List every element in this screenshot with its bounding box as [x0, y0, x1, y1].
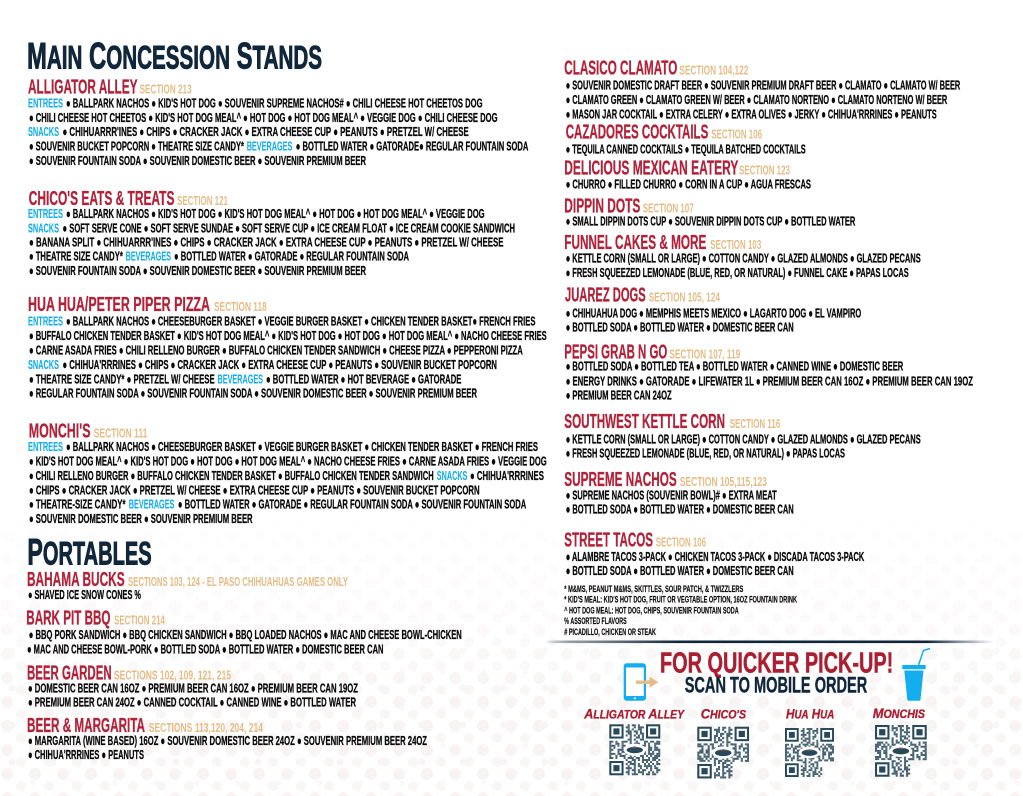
stand name: DIPPIN DOTS	[564, 194, 640, 217]
menu items: ● BOTTLED WATER ● GATORADE ● REGULAR FOUNTAIN SODA ● SOUVENIR FOUNTAIN SODA	[178, 498, 526, 512]
icon: phone with arrow	[624, 663, 658, 701]
menu items: ● BOTTLED SODA ● BOTTLED WATER ● DOMESTIC BEER CAN	[566, 502, 794, 516]
menu items: ● CHIHUA'RRRINES	[470, 469, 544, 483]
stand name: CAZADORES COCKTAILS	[566, 121, 708, 144]
heading: for quicker pick-up: FOR QUICKER PICK-UP!	[660, 648, 893, 680]
menu items: ● BOTTLED WATER ● GATORADE● REGULAR FOUNTAIN SODA	[296, 140, 528, 154]
panel: dippin dots	[564, 194, 855, 229]
menu items: ● SOUVENIR DOMESTIC BEER ● SOUVENIR PREMIUM BEER	[29, 512, 253, 526]
menu items: ● TEQUILA CANNED COCKTAILS ● TEQUILA BATCHED COCKTAILS	[566, 142, 806, 156]
menu items	[28, 315, 547, 400]
section label: SECTIONS 102, 109, 121, 215	[114, 667, 231, 682]
menu items: ENTREES	[28, 96, 63, 110]
menu items: BEVERAGES	[129, 498, 174, 512]
section label: SECTION 121	[177, 193, 228, 208]
menu items: ● REGULAR FOUNTAIN SODA ● SOUVENIR FOUNTAIN SODA ● SOUVENIR DOMESTIC BEER ● SOUVENIR PREMIUM BEER	[29, 386, 477, 400]
footnotes: # PICADILLO, CHICKEN OR STEAK	[564, 626, 656, 637]
menu items	[27, 628, 462, 657]
section label: SECTION 123	[739, 163, 790, 178]
section label: SECTION 111	[94, 425, 147, 440]
menu items: ● CARNE ASADA FRIES ● CHILI RELLENO BURGER ● BUFFALO CHICKEN TENDER SANDWICH ● CHEESE PIZZA ● PEPPERONI PIZZA	[29, 343, 523, 357]
label: CHICO'S	[701, 706, 746, 722]
section label: SECTION 105, 124	[649, 290, 720, 305]
menu items	[28, 681, 358, 709]
section label: SECTION 105,115,123	[680, 474, 767, 489]
panel: bahama bucks	[27, 568, 348, 602]
menu items: ENTREES	[28, 207, 63, 221]
qr code	[875, 725, 927, 777]
menu items	[566, 78, 960, 121]
background halftone dots	[1, 657, 1021, 796]
menu items: ● BALLPARK NACHOS ● CHEESEBURGER BASKET ● VEGGIE BURGER BASKET ● CHICKEN TENDER BASKET ● FRENCH FRIES	[66, 440, 538, 454]
menu items: ● MAC AND CHEESE BOWL-PORK ● BOTTLED SODA ● BOTTLED WATER ● DOMESTIC BEER CAN	[27, 643, 384, 657]
panel: funnel cakes and more	[564, 231, 921, 280]
menu items: ● BOTTLED SODA ● BOTTLED WATER ● DOMESTIC BEER CAN	[566, 321, 794, 335]
menu items	[566, 306, 861, 335]
subheading: scan to mobile order: SCAN TO MOBILE ORDER	[685, 673, 867, 698]
menu items: BEVERAGES	[247, 140, 292, 154]
qr code	[609, 724, 660, 775]
stand name: SOUTHWEST KETTLE CORN	[564, 410, 725, 433]
footnotes: % ASSORTED FLAVORS	[564, 615, 627, 626]
qr: alligator alley	[583, 706, 685, 775]
qr: chico's	[697, 706, 749, 778]
menu items	[28, 207, 515, 278]
qr code	[697, 727, 749, 778]
menu items: ● SUPREME NACHOS (SOUVENIR BOWL)# ● EXTRA MEAT	[566, 488, 777, 502]
footnotes: * M&MS, PEANUT M&MS, SKITTLES, SOUR PATCH, & TWIZZLERS	[564, 583, 743, 594]
menu items	[28, 440, 547, 526]
menu items: ● BANANA SPLIT ● CHIHUARRR'INES ● CHIPS ● CRACKER JACK ● EXTRA CHEESE CUP ● PEANUTS ● PRETZEL W/ CHEESE	[29, 236, 504, 250]
menu items: ● CHIHUARRR'INES ● CHIPS ● CRACKER JACK ● EXTRA CHEESE CUP ● PEANUTS ● PRETZEL W/ CHEESE	[62, 125, 469, 139]
menu items: ● BALLPARK NACHOS ● KID'S HOT DOG ● SOUVENIR SUPREME NACHOS# ● CHILI CHEESE HOT CHEETOS DOG	[66, 96, 483, 110]
section label: SECTION 213	[140, 81, 192, 96]
heading: portables: PORTABLES	[27, 531, 152, 572]
panel: juarez dogs	[565, 284, 861, 335]
panel: chico's eats and treats	[28, 187, 515, 278]
menu items: ● SOUVENIR BUCKET POPCORN ● THEATRE SIZE CANDY*	[29, 140, 244, 154]
menu items	[566, 433, 921, 461]
panel: supreme nachos	[564, 468, 794, 516]
panel: beer and margarita	[27, 714, 427, 762]
menu items: ENTREES	[28, 440, 63, 454]
menu items: ● BBQ PORK SANDWICH ● BBQ CHICKEN SANDWICH ● BBQ LOADED NACHOS ● MAC AND CHEESE BOWL-CHICKEN	[29, 628, 462, 642]
menu items: ● CHIHUA'RRRINES ● PEANUTS	[28, 748, 144, 762]
qr: hua hua	[785, 706, 834, 777]
menu items: ● DOMESTIC BEER CAN 16OZ ● PREMIUM BEER CAN 16OZ ● PREMIUM BEER CAN 19OZ	[28, 681, 358, 695]
stand name: ALLIGATOR ALLEY	[28, 75, 138, 98]
menu items: ● CHILI CHEESE HOT CHEETOS ● KID'S HOT DOG MEAL^ ● HOT DOG ● HOT DOG MEAL^ ● VEGGIE DOG ● CHILI CHEESE DOG	[29, 111, 498, 125]
menu items: SNACKS	[28, 125, 59, 139]
menu items: ENTREES	[28, 315, 63, 329]
stand name: PEPSI GRAB N GO	[564, 340, 667, 363]
menu items: BEVERAGES	[218, 372, 263, 386]
section label: SECTION 118	[214, 299, 267, 314]
section label: SECTION 104,122	[679, 62, 748, 77]
menu items: SNACKS	[28, 221, 59, 235]
footnotes: * KID'S MEAL: KID'S HOT DOG, FRUIT OR VEGTABLE OPTION, 16OZ FOUNTAIN DRINK	[564, 593, 797, 604]
panel: cazadores cocktails	[566, 121, 806, 156]
section label: SECTION 107	[643, 200, 694, 215]
stand name: BEER GARDEN	[27, 661, 112, 684]
panel: southwest kettle corn	[564, 410, 921, 461]
menu items: ● BALLPARK NACHOS ● CHEESEBURGER BASKET ● VEGGIE BURGER BASKET ● CHICKEN TENDER BASKET● FRENCH FRIES	[66, 315, 535, 329]
menu items	[566, 488, 794, 516]
stand name: JUAREZ DOGS	[565, 284, 646, 307]
menu items	[566, 252, 921, 280]
stand name: STREET TACOS	[564, 529, 653, 552]
stand name: HUA HUA/PETER PIPER PIZZA	[28, 293, 210, 316]
stand name: SUPREME NACHOS	[564, 468, 677, 491]
qr: monchis	[873, 705, 927, 777]
section label: SECTION 107, 119	[669, 346, 740, 361]
section label: SECTIONS 113,120, 204, 214	[149, 720, 264, 735]
menu items: ● BOTTLED WATER ● GATORADE ● REGULAR FOUNTAIN SODA	[174, 250, 409, 264]
label: ALLIGATOR ALLEY	[583, 706, 685, 722]
stand name: MONCHI'S	[29, 419, 90, 442]
menu items: ● KID'S HOT DOG MEAL^ ● KID'S HOT DOG ● HOT DOG ● HOT DOG MEAL^ ● NACHO CHEESE FRIES ● CARNE ASADA FRIES ● VEGGIE DOG	[29, 455, 547, 469]
panel: monchi's	[28, 419, 547, 526]
menu items	[28, 96, 528, 168]
panel: delicious mexican eatery	[564, 157, 811, 192]
menu items: ● SOUVENIR FOUNTAIN SODA ● SOUVENIR DOMESTIC BEER ● SOUVENIR PREMIUM BEER	[29, 264, 366, 278]
menu items: ● CHIHUA'RRRINES ● CHIPS ● CRACKER JACK ● EXTRA CHEESE CUP ● PEANUTS ● SOUVENIR BUCKET POPCORN	[62, 358, 497, 372]
menu items: ● THEATRE-SIZE CANDY*	[29, 498, 126, 512]
menu items: BEVERAGES	[126, 250, 171, 264]
menu items: ● CHILI RELLENO BURGER ● BUFFALO CHICKEN TENDER BASKET ● BUFFALO CHICKEN TENDER SANDWICH	[29, 469, 434, 483]
panel: clasico clamato	[564, 56, 960, 121]
section label: SECTION 106	[711, 127, 762, 142]
menu items: ● MARGARITA (WINE BASED) 16OZ ● SOUVENIR DOMESTIC BEER 24OZ ● SOUVENIR PREMIUM BEER 24OZ	[28, 734, 427, 748]
menu items: SNACKS	[28, 358, 59, 372]
section label: SECTION 103	[710, 237, 761, 252]
menu items: ● THEATRE SIZE CANDY* ● PRETZEL W/ CHEESE	[29, 372, 215, 386]
section label: SECTIONS 103, 124 - EL PASO CHIHUAHUAS GAMES ONLY	[128, 574, 348, 589]
label: MONCHIS	[873, 705, 925, 721]
panel: mobile order	[583, 648, 930, 778]
section label: SECTION 116	[730, 416, 780, 431]
menu items: SNACKS	[437, 469, 467, 483]
stand name: BAHAMA BUCKS	[27, 568, 125, 591]
qr code	[785, 728, 834, 777]
menu items: ● BOTTLED SODA ● BOTTLED WATER ● DOMESTIC BEER CAN	[566, 564, 794, 578]
divider rule	[545, 640, 994, 643]
panel: street tacos	[564, 529, 864, 578]
section label: SECTION 106	[656, 535, 706, 550]
stand name: BEER & MARGARITA	[27, 714, 145, 737]
menu items: ● BOTTLED WATER ● HOT BEVERAGE ● GATORADE	[266, 372, 461, 386]
menu items	[566, 360, 973, 403]
menu items: ● CHIPS ● CRACKER JACK ● PRETZEL W/ CHEESE ● EXTRA CHEESE CUP ● PEANUTS ● SOUVENIR BUCKET POPCORN	[29, 483, 480, 497]
menu items: ● PREMIUM BEER CAN 24OZ	[566, 389, 672, 403]
section label: SECTION 214	[114, 612, 165, 627]
menu items: ● THEATRE SIZE CANDY*	[29, 250, 123, 264]
label: HUA HUA	[786, 706, 834, 722]
stand name: BARK PIT BBQ	[26, 606, 111, 629]
stand name: DELICIOUS MEXICAN EATERY	[564, 157, 738, 180]
menu items: ● PREMIUM BEER CAN 24OZ ● CANNED COCKTAIL ● CANNED WINE ● BOTTLED WATER	[28, 695, 356, 709]
stand name: FUNNEL CAKES & MORE	[564, 231, 706, 254]
panel: alligator alley	[28, 75, 528, 168]
menu items: ● BUFFALO CHICKEN TENDER BASKET ● KID'S HOT DOG MEAL^ ● KID'S HOT DOG ● HOT DOG ● HOT DOG MEAL^ ● NACHO CHEESE FRIES	[29, 329, 547, 343]
menu items: ● SHAVED ICE SNOW CONES %	[28, 588, 141, 602]
panel: bark pit bbq	[26, 606, 462, 657]
menu items: ● SOUVENIR FOUNTAIN SODA ● SOUVENIR DOMESTIC BEER ● SOUVENIR PREMIUM BEER	[29, 154, 366, 168]
icon: drink cup	[902, 648, 930, 701]
panel: pepsi grab n go	[564, 340, 973, 403]
menu items	[28, 734, 427, 762]
panel: hua hua / peter piper pizza	[28, 293, 547, 400]
stand name: CLASICO CLAMATO	[564, 56, 677, 79]
footnotes: ^ HOT DOG MEAL: HOT DOG, CHIPS, SOUVENIR FOUNTAIN SODA	[564, 604, 739, 615]
panel: beer garden	[27, 661, 358, 709]
stand name: CHICO'S EATS & TREATS	[29, 187, 174, 210]
menu items: ● SOFT SERVE CONE ● SOFT SERVE SUNDAE ● SOFT SERVE CUP ● ICE CREAM FLOAT ● ICE CREAM COOKIE SANDWICH	[62, 221, 515, 235]
menu items	[566, 550, 864, 578]
menu items: ● CHURRO ● FILLED CHURRO ● CORN IN A CUP ● AGUA FRESCAS	[566, 178, 811, 192]
menu items: ● BALLPARK NACHOS ● KID'S HOT DOG ● KID'S HOT DOG MEAL^ ● HOT DOG ● HOT DOG MEAL^ ● VEGGIE DOG	[66, 207, 485, 221]
footnotes	[564, 583, 797, 637]
heading: main concession stands: MAIN CONCESSION STANDS	[27, 36, 322, 77]
